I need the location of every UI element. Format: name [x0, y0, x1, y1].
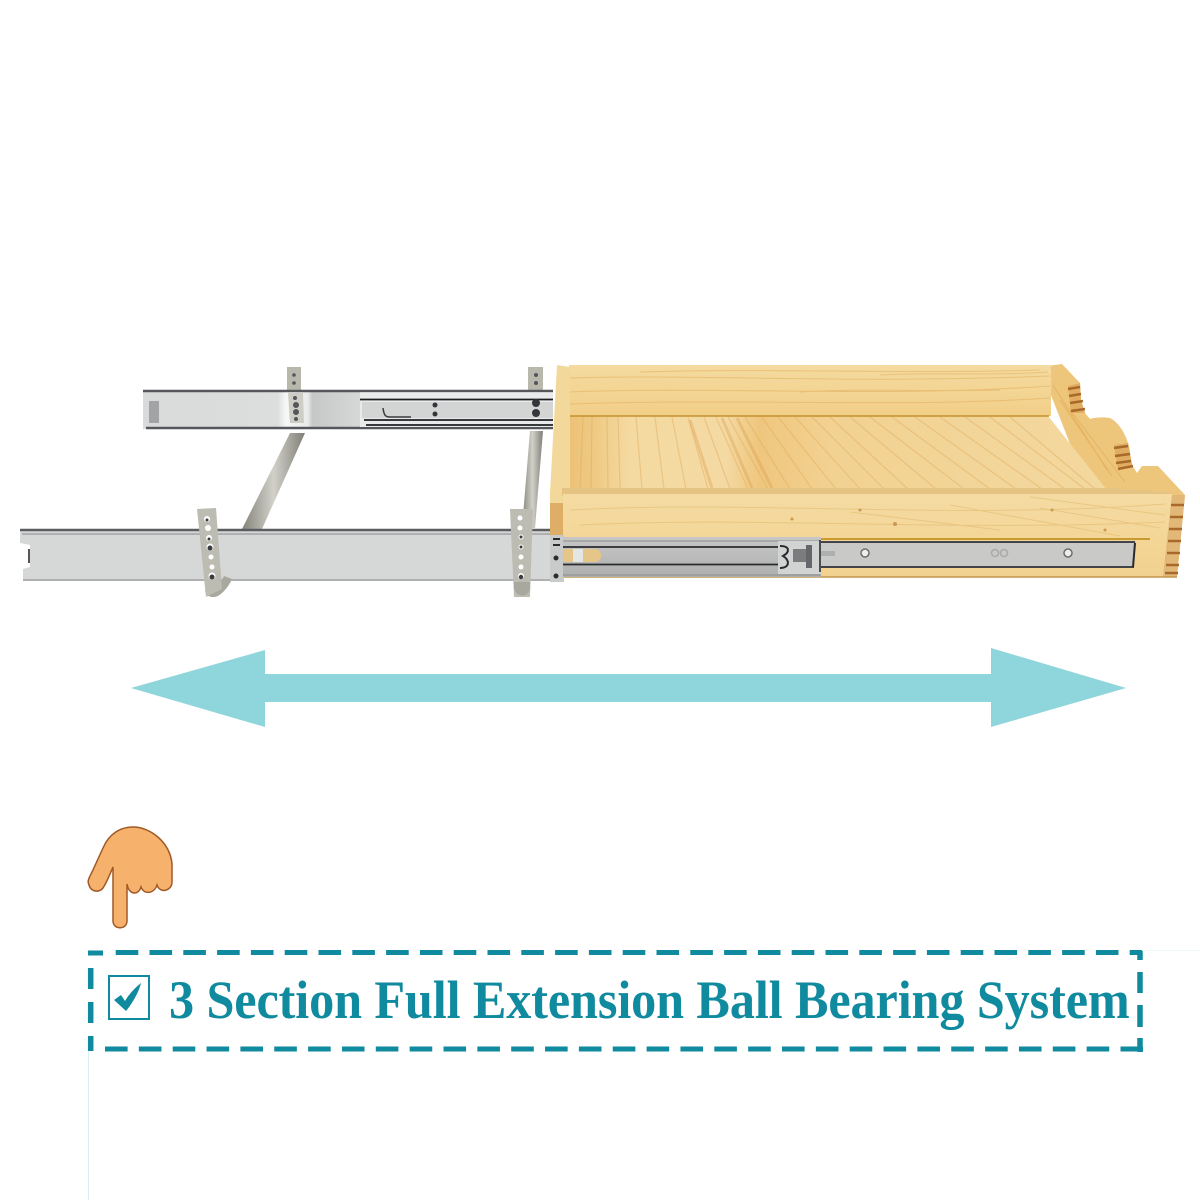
inner slide section — [821, 541, 1136, 568]
lower rail end notch — [28, 549, 30, 563]
lower slide rail — [20, 508, 1136, 597]
drawer bottom shadow — [563, 576, 1177, 578]
tick mark — [114, 983, 141, 1011]
checkbox outline — [109, 976, 149, 1019]
icon: pointing hand — [88, 827, 172, 928]
middle slide tracks — [563, 547, 821, 564]
inner rail section — [360, 393, 553, 427]
upper rail end mark — [149, 401, 159, 423]
callout title: 3 Section Full Extension Ball Bearing System — [169, 971, 1130, 1030]
left bracket hole shadows — [206, 518, 214, 580]
faint left guide line — [88, 1050, 90, 1200]
wooden drawer — [550, 364, 1185, 577]
right dashes — [1137, 951, 1143, 1052]
drawer right side wall — [1040, 364, 1185, 577]
rail end plate — [550, 535, 564, 582]
dashed callout box — [88, 951, 1143, 1052]
middle slide section — [563, 537, 821, 577]
upper bracket top tab — [287, 367, 301, 392]
upper bracket right tab — [528, 367, 543, 392]
left dashes — [88, 968, 93, 1051]
outer rail edges — [143, 391, 553, 428]
left bracket holes — [204, 516, 216, 580]
release latch — [778, 540, 821, 574]
inner right wall grain — [1053, 385, 1125, 482]
front panel knots — [790, 508, 1106, 532]
dovetail end grain back — [1068, 383, 1085, 413]
middle slide lower groove — [563, 541, 821, 575]
lower outer rail body — [20, 530, 550, 581]
back panel wood grain — [570, 370, 1050, 404]
latch bar — [806, 545, 812, 568]
front panel wood grain — [570, 497, 1165, 536]
dovetail stripes front — [1165, 505, 1184, 573]
left J bracket hook — [205, 576, 232, 597]
drawer front panel top edge — [562, 488, 1172, 496]
inner slide stamped mark — [992, 550, 1008, 556]
lower rail top edge — [20, 529, 550, 531]
left end grain — [550, 503, 563, 535]
drawer left side wall — [550, 365, 570, 540]
floor wood grain — [580, 417, 1095, 489]
faint right guide line — [1143, 950, 1200, 952]
darker floor grain band — [690, 418, 772, 488]
rear diagonal brace — [242, 433, 305, 529]
latch light backing — [778, 541, 821, 574]
back panel lower shadow — [569, 415, 1049, 417]
right bracket hole shadows — [519, 536, 523, 579]
icon: checkbox with tick — [109, 976, 149, 1019]
rear right brace — [522, 431, 543, 528]
latch spring clip — [780, 546, 788, 568]
latch end line — [819, 540, 821, 572]
upper bracket on rail — [288, 393, 304, 423]
drawer back panel — [569, 365, 1051, 416]
back end grain stripes — [1068, 387, 1085, 411]
back end grain base — [1068, 383, 1085, 413]
left bracket plate — [197, 508, 222, 597]
inner rail dark tracks — [360, 400, 553, 425]
inner slide edges — [821, 542, 1135, 567]
inner rail rivets — [432, 399, 540, 417]
inner slide end cap — [1133, 543, 1135, 567]
wood-coloured slot — [563, 549, 601, 562]
small stud — [821, 551, 835, 556]
drawer right dovetail joint — [1163, 495, 1185, 577]
latch slider — [793, 549, 806, 562]
gold line above inner slide — [820, 538, 1150, 540]
inner rail light center — [362, 402, 553, 418]
slot tab — [573, 549, 583, 562]
right J bracket plate — [510, 509, 533, 597]
right bracket holes — [518, 516, 524, 579]
top dashes — [116, 950, 1142, 955]
end plate holes — [553, 538, 560, 578]
lower rail lip — [22, 534, 550, 580]
double-headed extension arrow — [131, 648, 1126, 727]
top-left corner — [88, 950, 103, 956]
bracket holes — [292, 373, 538, 421]
dovetail end grain hump — [1114, 443, 1133, 470]
right bracket hook — [514, 582, 530, 596]
drawer floor — [563, 416, 1107, 490]
hump end grain base — [1114, 443, 1132, 470]
inner slide rivets — [861, 549, 1072, 557]
inner rail slot — [383, 408, 411, 417]
bottom dashes — [105, 1046, 1143, 1052]
upper slide rail — [143, 367, 553, 429]
outer rail body — [143, 391, 360, 429]
hump end grain stripes — [1114, 446, 1133, 469]
drawer front panel — [563, 494, 1172, 577]
